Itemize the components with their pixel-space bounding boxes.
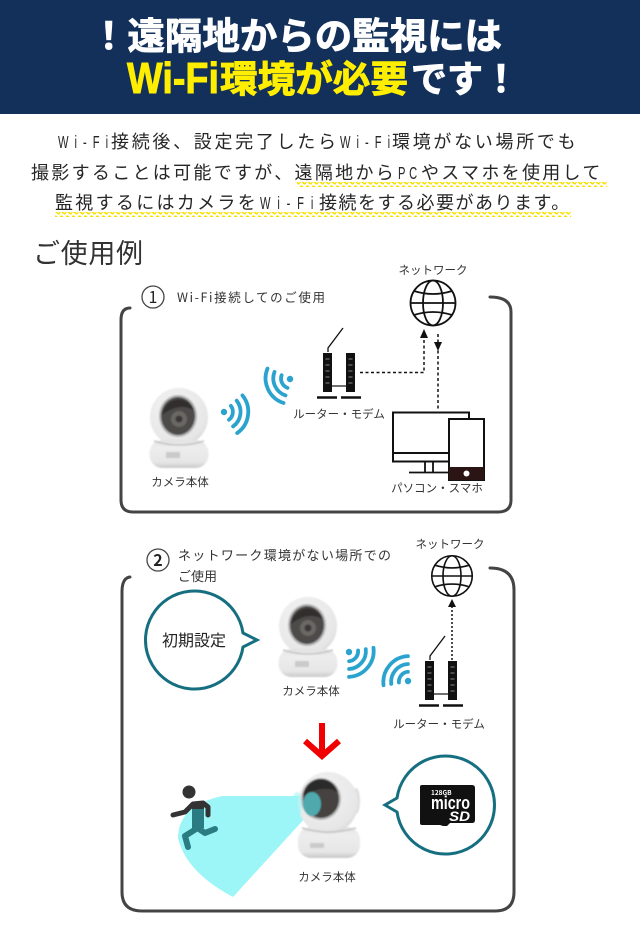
- dashed link: router to network: [360, 329, 428, 372]
- icon: network globe: [398, 262, 468, 326]
- panel 2: use without network: [122, 536, 514, 911]
- panel 1 frame: [121, 297, 511, 512]
- panel 1 number: [142, 284, 164, 308]
- intro text block: Wi-Fi: [260, 193, 320, 214]
- icon: router: ルーター・モデム: [293, 406, 385, 422]
- icon: camera: [278, 597, 340, 699]
- panel 2 heading: ご使用: [178, 566, 217, 585]
- icon: microSD card: micro: [431, 793, 470, 813]
- icon: wifi to router: [260, 360, 301, 406]
- icon: camera with rotated lens: [292, 772, 360, 885]
- intro text block: Wi-Fi: [340, 132, 396, 153]
- intro text block: 撮影することは可能ですが、遠隔地から: [31, 159, 396, 185]
- intro text block: [31, 128, 603, 215]
- heading: usage examples: ご使用例: [33, 232, 143, 271]
- intro text block: 接続をする必要があります。: [319, 189, 571, 215]
- panel 2 frame: [122, 568, 514, 911]
- icon: PC and smartphone: パソコン・スマホ: [391, 480, 483, 496]
- icon: camera: カメラ本体: [151, 474, 209, 490]
- icon: camera with rotated lens: カメラ本体: [298, 869, 356, 885]
- intro text block: 監視するにはカメラを: [55, 189, 258, 215]
- title line 2: 環境が必要: [220, 49, 408, 103]
- icon: router: [393, 636, 485, 732]
- title line 2: [127, 49, 519, 103]
- intro text block: Wi-Fi: [58, 132, 114, 153]
- intro text block: PC: [398, 163, 421, 184]
- panel 2 number: [147, 547, 169, 571]
- yellow wavy underlines: [55, 182, 607, 217]
- panel 2 heading: ネットワーク環境がない場所での: [178, 545, 391, 564]
- icon: network globe: ネットワーク: [416, 536, 484, 552]
- icon: running person: [173, 786, 215, 847]
- icon: router: [293, 328, 385, 422]
- intro text block: やスマホを使用して: [421, 159, 603, 185]
- dotted link: router to network: [448, 599, 456, 660]
- icon: network globe: [416, 536, 484, 596]
- icon: wifi from camera: [334, 635, 380, 682]
- icon: microSD card: [420, 785, 475, 826]
- intro text block: 接続後、設定完了したら: [111, 128, 339, 154]
- dashed link: network to devices: [434, 334, 442, 411]
- title line 2: Wi-Fi: [127, 54, 219, 103]
- icon: wifi to router: [377, 651, 423, 698]
- icon: camera: カメラ本体: [282, 683, 340, 699]
- panel 1 number: 1: [149, 284, 157, 308]
- panel 1 heading: Wi-Fi接続してのご使用: [177, 287, 325, 306]
- callout: microSD storage: [385, 756, 494, 854]
- panel 1: Wi-Fi connected use: [121, 262, 511, 512]
- icon: microSD card: SD: [449, 808, 470, 824]
- icon: router: ルーター・モデム: [393, 716, 485, 732]
- title line 1: ！遠隔地からの監視には: [90, 6, 502, 60]
- icon: camera: [150, 388, 209, 490]
- camera field of view: [178, 796, 306, 897]
- panel 2 heading: [178, 545, 391, 585]
- header band: [0, 0, 640, 114]
- callout: initial setup: [146, 591, 257, 689]
- intro text block: 環境がない場所でも: [392, 128, 578, 154]
- arrow: red down: [305, 723, 339, 756]
- callout: initial setup: 初期設定: [162, 627, 226, 651]
- icon: wifi from camera: [218, 393, 251, 434]
- icon: PC and smartphone: [391, 412, 484, 496]
- icon: network globe: ネットワーク: [398, 262, 468, 278]
- panel 2 number: 2: [153, 547, 163, 571]
- title line 2: です！: [411, 49, 519, 103]
- icon: microSD card: 128GB: [431, 787, 452, 797]
